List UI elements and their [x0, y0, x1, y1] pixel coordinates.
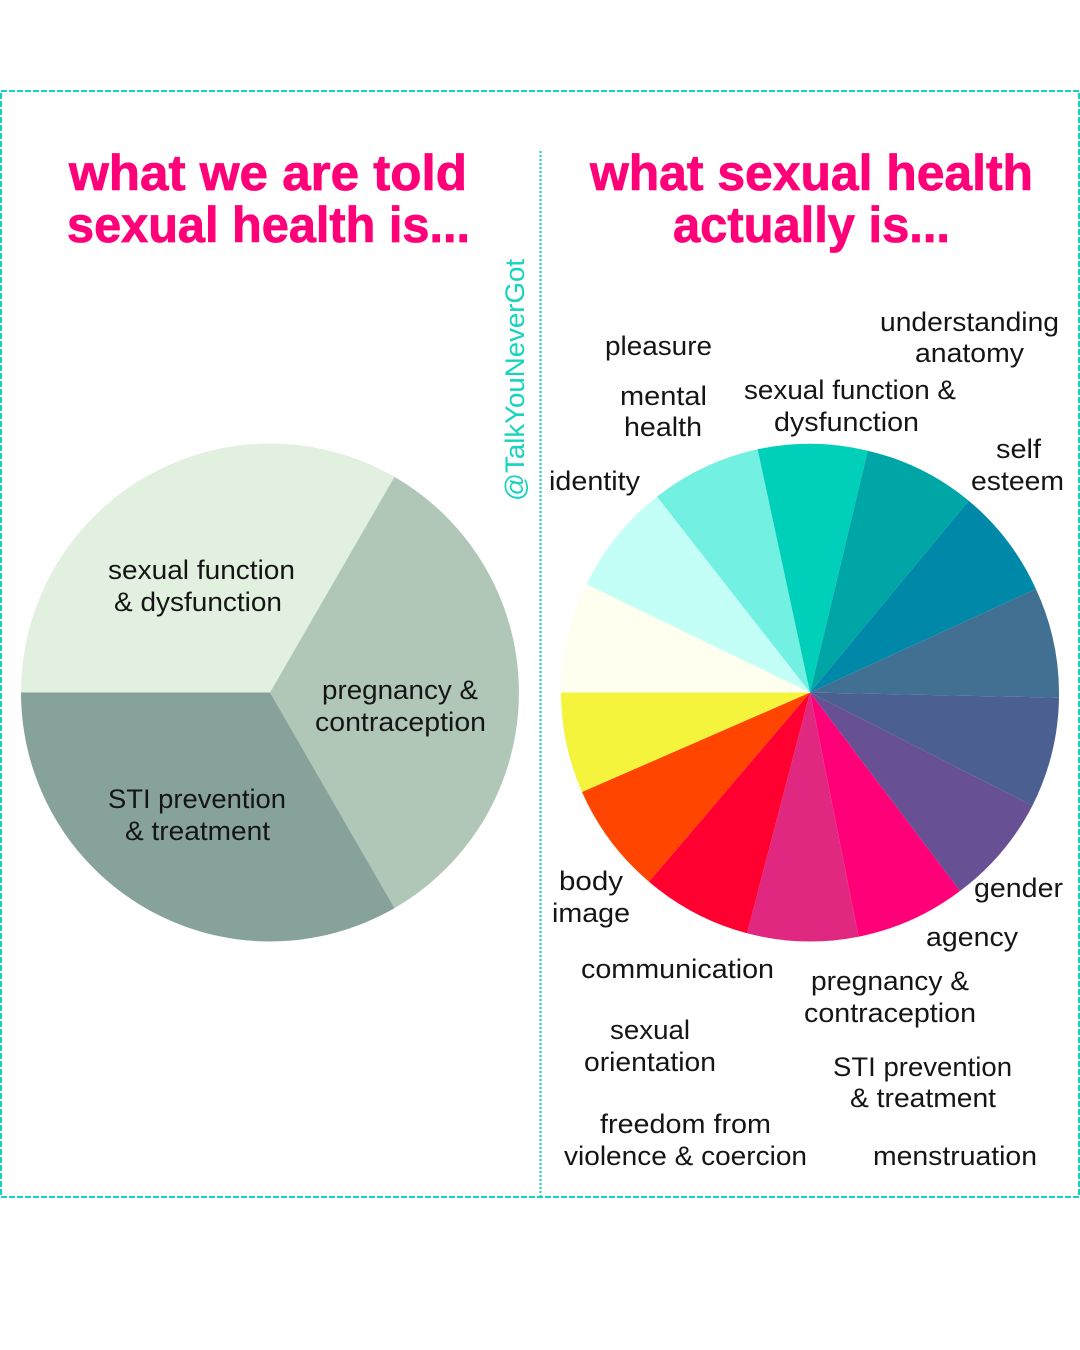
- slice: navy blue: [810, 692, 1059, 806]
- heading: what we are told: sexual health is...: [67, 197, 470, 253]
- label: STI prevention and treatment: STI prevention: [833, 1052, 1012, 1082]
- label: self esteem: [971, 434, 1064, 496]
- label: sexual orientation: sexual: [610, 1015, 690, 1045]
- slice: slate blue: [810, 589, 1059, 698]
- slice: orange: [582, 692, 810, 882]
- slice: cream: [561, 584, 810, 692]
- label: pregnancy and contraception: [804, 966, 976, 1028]
- slice: turquoise: [758, 444, 868, 692]
- label: freedom from violence and coercion: freedom from: [600, 1109, 771, 1139]
- slice: red: [649, 692, 810, 933]
- label: sexual function and dysfunction: sexual function &: [744, 375, 956, 405]
- label: body image: [552, 866, 630, 928]
- label: menstruation: menstruation: [873, 1141, 1037, 1171]
- slice: sexual function and dysfunction: [21, 444, 394, 692]
- label: pregnancy and contraception: contraception: [315, 707, 486, 737]
- label: STI prevention and treatment: [108, 784, 286, 846]
- slice: blue teal: [810, 501, 1036, 692]
- label: sexual function and dysfunction: [108, 555, 295, 617]
- label: understanding anatomy: [880, 307, 1059, 368]
- heading: what sexual health actually is: actually is...: [673, 197, 950, 253]
- slice: hot pink: [810, 692, 960, 937]
- slice: pale cyan: [586, 497, 810, 692]
- label: self esteem: self: [996, 434, 1042, 464]
- label: sexual function and dysfunction: sexual function: [108, 555, 295, 585]
- slice: magenta: [747, 692, 858, 941]
- label: pregnancy and contraception: pregnancy &: [811, 966, 969, 996]
- label: pleasure: pleasure: [605, 331, 712, 361]
- label: self esteem: esteem: [971, 466, 1064, 496]
- label: sexual function and dysfunction: [744, 375, 956, 437]
- label: gender: gender: [974, 873, 1063, 903]
- label: STI prevention and treatment: STI prevention: [108, 784, 286, 814]
- slice: STI prevention and treatment: [21, 692, 394, 941]
- label: body image: image: [552, 898, 630, 928]
- label: mental health: health: [624, 412, 702, 442]
- label: mental health: mental: [620, 381, 707, 411]
- panel: three-slice pie chart: [21, 444, 519, 941]
- panel: fourteen-slice pie chart: [561, 444, 1059, 941]
- label: pregnancy and contraception: [315, 675, 486, 737]
- label: identity: identity: [549, 466, 641, 496]
- heading: what sexual health actually is: what sexual health: [589, 145, 1033, 201]
- slice: purple: [810, 692, 1032, 891]
- label: body image: body: [559, 866, 624, 896]
- label: STI prevention and treatment: & treatment: [850, 1083, 997, 1113]
- label: agency: agency: [926, 922, 1019, 952]
- label: communication: communication: [581, 954, 774, 984]
- slice: yellow: [561, 692, 810, 792]
- label: sexual orientation: orientation: [584, 1047, 716, 1077]
- label: sexual function and dysfunction: dysfunction: [774, 407, 919, 437]
- label: STI prevention and treatment: [833, 1052, 1012, 1113]
- label: understanding anatomy: understanding: [880, 307, 1059, 337]
- label: pregnancy and contraception: contraception: [804, 998, 976, 1028]
- heading: what we are told: [67, 145, 470, 253]
- slice: teal: [810, 451, 969, 692]
- slice: pregnancy and contraception: [270, 477, 519, 908]
- label: STI prevention and treatment: & treatment: [125, 816, 271, 846]
- label: understanding anatomy: anatomy: [915, 338, 1025, 368]
- heading: what sexual health actually is: [589, 145, 1033, 253]
- label: freedom from violence and coercion: violence & coercion: [564, 1141, 807, 1171]
- label: freedom from violence and coercion: [564, 1109, 807, 1171]
- handle: @TalkYouNeverGot: @TalkYouNeverGot: [500, 258, 530, 501]
- label: sexual function and dysfunction: & dysfunction: [114, 587, 282, 617]
- label: mental health: [620, 381, 707, 442]
- heading: what we are told: what we are told: [68, 145, 467, 201]
- dotted centre divider: [540, 151, 542, 1197]
- label: pregnancy and contraception: pregnancy &: [322, 675, 478, 705]
- label: sexual orientation: [584, 1015, 716, 1077]
- slice: aqua: [657, 449, 810, 692]
